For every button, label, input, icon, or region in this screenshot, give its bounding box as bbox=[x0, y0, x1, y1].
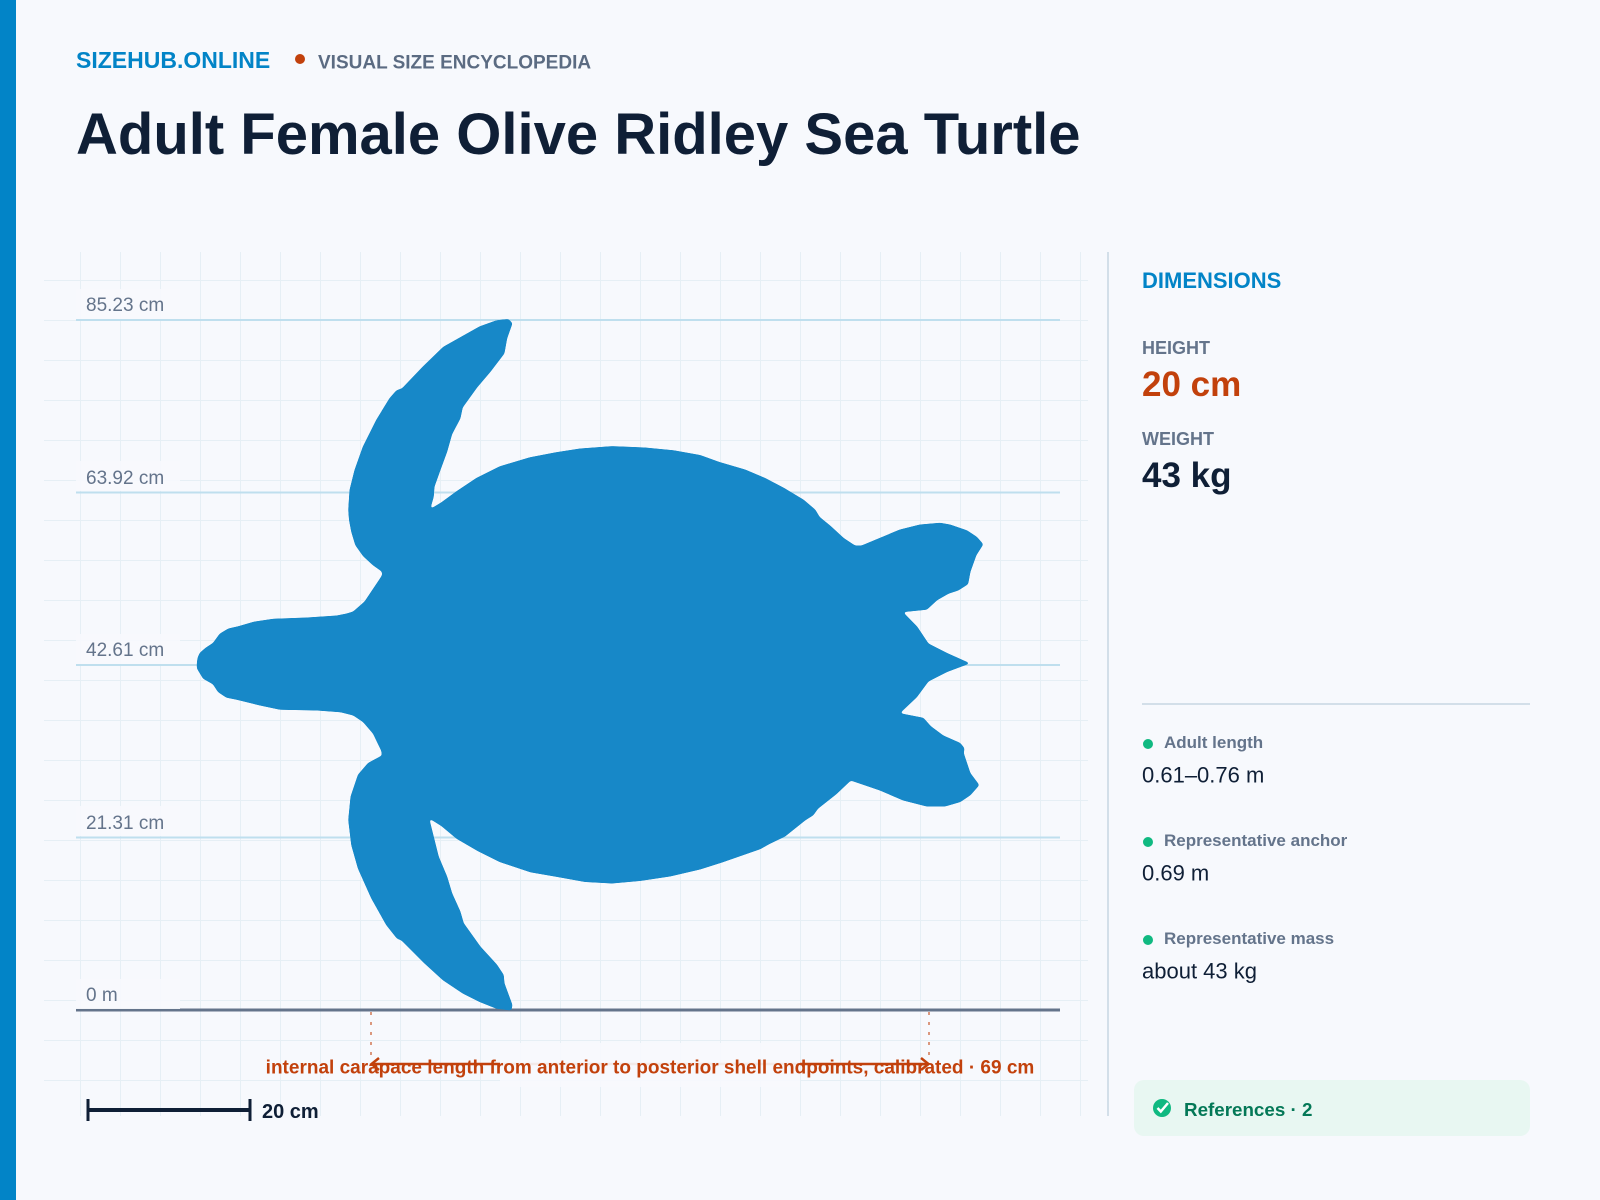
tagline: VISUAL SIZE ENCYCLOPEDIA bbox=[318, 52, 591, 74]
panel: dimensions bbox=[1142, 268, 1281, 495]
carapace length measurement bbox=[266, 1012, 1034, 1087]
measurement guides bbox=[371, 1012, 929, 1058]
weight stat: 43 kg bbox=[1142, 456, 1232, 495]
title: Adult Female Olive Ridley Sea Turtle bbox=[76, 102, 1081, 167]
panel divider bbox=[1107, 252, 1109, 1116]
fact: representative anchor: Representative anchor bbox=[1164, 831, 1348, 850]
fact: representative mass bbox=[1142, 929, 1334, 984]
brand dot bbox=[295, 54, 305, 64]
fact: representative anchor: 0.69 m bbox=[1142, 860, 1209, 886]
panel heading: DIMENSIONS bbox=[1142, 268, 1281, 293]
turtle silhouette bbox=[197, 320, 983, 1010]
scale bar bbox=[88, 1099, 319, 1123]
weight stat: WEIGHT bbox=[1142, 429, 1214, 449]
height labels: 85.23 cm bbox=[86, 295, 164, 316]
height labels: 42.61 cm bbox=[86, 640, 164, 661]
scale bar: 20 cm bbox=[262, 1101, 319, 1123]
header brand row bbox=[76, 47, 591, 74]
height labels bbox=[76, 289, 180, 1009]
brand name: SIZEHUB.ONLINE bbox=[76, 47, 270, 73]
height stat: 20 cm bbox=[1142, 365, 1241, 404]
height stat: HEIGHT bbox=[1142, 338, 1210, 358]
fact: representative mass: about 43 kg bbox=[1142, 958, 1257, 984]
references badge bbox=[1134, 1080, 1530, 1136]
references text: References · 2 bbox=[1184, 1099, 1312, 1120]
height labels: 0 m bbox=[86, 985, 118, 1006]
measurement arrow bbox=[372, 1058, 928, 1070]
ground axis line bbox=[76, 1008, 1060, 1012]
fact: adult length bbox=[1142, 733, 1264, 788]
height labels: 63.92 cm bbox=[86, 468, 164, 489]
weight stat bbox=[1142, 429, 1232, 495]
height reference lines bbox=[76, 320, 1060, 838]
icon: check circle bbox=[1153, 1099, 1171, 1117]
measurement label: internal carapace length from anterior to posterior shell endpoints, calibrated · 69 cm bbox=[266, 1058, 1034, 1078]
fact: representative anchor bbox=[1142, 831, 1348, 886]
chart: turtle silhouette on scale grid bbox=[44, 252, 1088, 1123]
panel: facts list bbox=[1142, 733, 1348, 984]
divider bbox=[1142, 703, 1530, 705]
height stat bbox=[1142, 338, 1241, 404]
fact: adult length: 0.61–0.76 m bbox=[1142, 762, 1264, 788]
accent bar bbox=[0, 0, 16, 1200]
fact: representative mass: Representative mass bbox=[1164, 929, 1334, 948]
fact: adult length: Adult length bbox=[1164, 733, 1263, 752]
height labels: 21.31 cm bbox=[86, 813, 164, 834]
